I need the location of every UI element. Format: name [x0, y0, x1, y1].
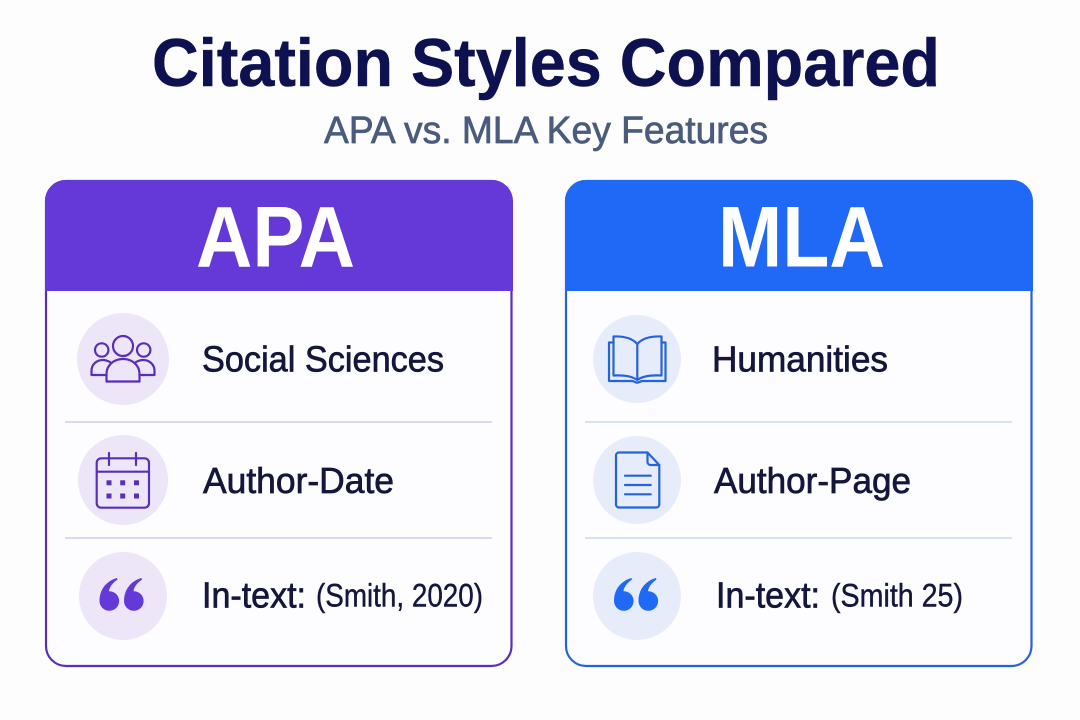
text: Author-Date: Author-Date: [203, 460, 394, 501]
text: In-text MLA: [716, 574, 963, 616]
heading: APA: APA: [196, 190, 355, 286]
icon: calendar: [78, 435, 168, 525]
icon: quotation marks: [593, 552, 681, 640]
panel: MLA: [565, 180, 1033, 666]
text: Author-Page: Author-Page: [714, 460, 911, 501]
panel header: APA: [45, 180, 513, 291]
text: In-text MLA: (Smith 25): [831, 578, 963, 614]
panel header: MLA: [565, 180, 1033, 291]
text: In-text APA: [202, 574, 483, 616]
icon: open book: [593, 315, 681, 403]
panel body: MLA: [566, 181, 1032, 666]
panel body: APA: [46, 181, 512, 666]
heading: MLA: MLA: [718, 190, 885, 286]
panel: APA: [45, 180, 513, 666]
title: Citation Styles Compared: [152, 25, 940, 101]
text: In-text MLA: In-text:: [716, 574, 820, 616]
text: Social Sciences: Social Sciences: [202, 338, 444, 380]
text: In-text APA: In-text:: [202, 574, 306, 616]
icon: people: [77, 313, 169, 405]
text: In-text APA: (Smith, 2020): [316, 578, 483, 614]
icon: document: [593, 436, 681, 524]
subtitle: APA vs. MLA Key Features: [324, 110, 768, 152]
text: Humanities: Humanities: [712, 338, 888, 380]
icon: quotation marks: [79, 552, 167, 640]
